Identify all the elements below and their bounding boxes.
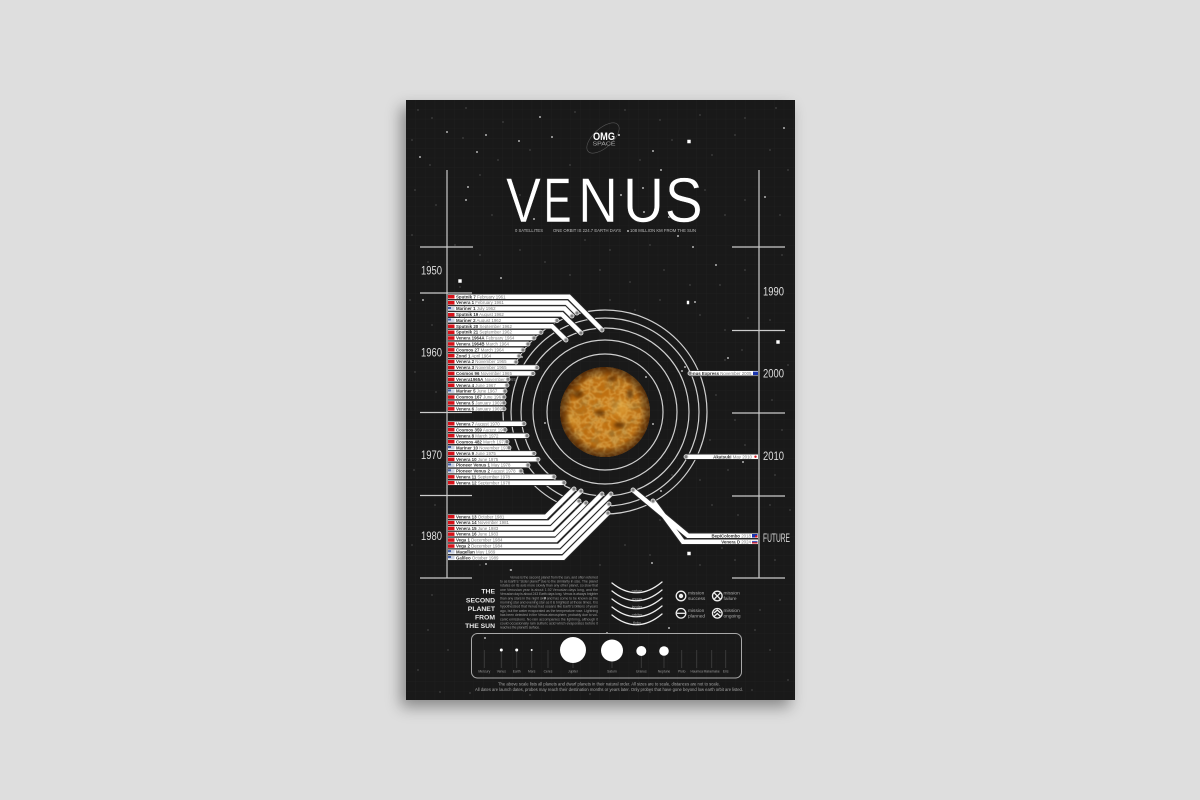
mission: Venus Express: Venus Express November 2005 — [688, 371, 752, 376]
mission: Venera 3: Venera 3 November 1965 — [456, 365, 507, 370]
mission: BepiColombo — [631, 488, 758, 538]
mission: Cosmos 167: Cosmos 167 June 1967 — [456, 395, 504, 400]
logo: OMG Space — [582, 118, 624, 158]
description text block: ago, but the water evaporated as the temperature rose. Lightning — [500, 609, 598, 613]
mission: Venera 1964B: Venera 1964B March 1964 — [456, 342, 510, 346]
description text block: Venusian day is about 243 Earth days long. Venus is always brighter — [500, 592, 599, 596]
missions 1970s — [448, 421, 566, 485]
poster grid texture — [406, 100, 795, 700]
mission: Cosmos 27: Cosmos 27 March 1964 — [456, 347, 504, 352]
description text block: could occasionally rain sulfuric acid which evaporates before it — [500, 622, 598, 626]
icon: mission failure — [712, 591, 722, 601]
mission: Galileo: Galileo October 1989 — [456, 555, 499, 560]
mission: Vega 2: Vega 2 December 1984 — [456, 544, 503, 549]
mission: Magellan — [448, 502, 611, 554]
footnote: The above scale lists all planets and dwarf planets in their natural order. All sizes are to scale, distances are not to scale. — [498, 682, 720, 686]
mission: Akatsuki: Akatsuki May 2010 — [713, 454, 753, 459]
label: mission success: success — [688, 597, 706, 602]
legend: mission types arcs: orbiter — [632, 613, 643, 617]
title: V — [506, 166, 541, 236]
title: S — [665, 166, 703, 236]
Venus: Venus — [497, 670, 506, 674]
year labels: 1960 — [421, 346, 442, 360]
Venus — [497, 648, 506, 674]
Earth: Earth — [513, 670, 521, 674]
footnote: All dates are launch dates, probes may reach their destination months or years later. Only probes that have gone beyond low earth orbit are listed. — [475, 687, 743, 692]
Haumea: Haumea — [690, 670, 703, 674]
mission: Cosmos 482: Cosmos 482 March 1972 — [456, 439, 507, 444]
mission: Venera 15: Venera 15 June 1983 — [456, 526, 499, 531]
mission: Venera 7: Venera 7 August 1970 — [456, 421, 500, 426]
Pluto: Pluto — [678, 670, 686, 674]
mission: Venera 13 — [448, 487, 576, 519]
Neptune: Neptune — [658, 670, 670, 674]
mission: Sputnik 7: Sputnik 7 February 1961 — [456, 294, 506, 299]
timeline axis left — [420, 170, 473, 578]
Ceres — [544, 650, 553, 674]
mission: Cosmos 96 — [448, 371, 535, 376]
subtitle facts: ONE ORBIT IS 224.7 EARTH DAYS — [553, 228, 621, 233]
mission: Cosmos 27 — [448, 347, 525, 352]
Ceres: Ceres — [544, 670, 553, 674]
planet Venus — [558, 365, 652, 460]
logo: OMG Space: OMG — [593, 131, 615, 143]
Mercury — [478, 650, 491, 674]
label: mission success: mission — [688, 592, 704, 596]
mission: Venera D: Venera D 2024 — [721, 539, 752, 544]
subtitle facts: 108 MILLION KM FROM THE SUN — [630, 228, 696, 233]
description text block: to as Earth's "sister planet" due to the similarity in size. The planet — [500, 580, 598, 584]
heading: the second planet from the sun: SECOND — [466, 597, 495, 604]
mission: Vega 2 — [448, 492, 613, 549]
mission: Venera 2: Venera 2 November 1965 — [456, 359, 507, 364]
Eris: Eris — [723, 670, 729, 674]
mission: Mariner 2: Mariner 2 August 1962 — [456, 318, 502, 323]
year labels: 2010 — [763, 449, 784, 463]
mission: Sputnik 7 — [448, 294, 604, 332]
label: mission ongoing: mission — [724, 609, 740, 614]
mission: Mariner 10: Mariner 10 November 1973 — [456, 445, 511, 450]
mission: Venera 5: Venera 5 January 1969 — [456, 400, 502, 406]
Eris — [723, 650, 729, 674]
legend: mission types arcs: flyby — [633, 621, 641, 625]
year labels: FUTURE — [763, 531, 790, 545]
mission: Venera 15 — [448, 499, 581, 531]
Haumea — [690, 650, 703, 674]
missions 1960s — [448, 294, 604, 411]
mission: Vega 1: Vega 1 December 1984 — [456, 538, 503, 543]
Makemake: Makemake — [704, 670, 720, 674]
heading: the second planet from the sun: THE — [481, 588, 495, 595]
dark casing behind mission bars — [448, 297, 758, 542]
mission: Zond 1 — [448, 353, 521, 358]
icon: mission planned — [676, 608, 686, 618]
heading: the second planet from the sun: PLANET — [468, 606, 496, 613]
mission: Sputnik 19 — [448, 312, 583, 335]
Jupiter — [560, 637, 586, 674]
mission: Venera 6: Venera 6 January 1969 — [456, 406, 502, 411]
mission: Mariner 2 — [448, 318, 559, 323]
label: mission failure: mission — [724, 592, 740, 596]
legend: mission status — [676, 590, 741, 620]
mission: Venera 1964B — [448, 342, 530, 346]
Uranus: Uranus — [636, 670, 647, 674]
label: mission planned: planned — [688, 614, 705, 620]
mission: Venera 11: Venera 11 September 1978 — [456, 474, 511, 479]
description text block: reaches the planet's surface. — [500, 626, 540, 630]
legend: mission types arcs: moon — [632, 597, 642, 601]
mission: Venera 1964A: Venera 1964A February 1964 — [456, 336, 515, 341]
mission: Vega 1 — [448, 492, 604, 543]
legend: mission types arcs — [612, 582, 662, 625]
Earth — [513, 648, 521, 674]
mission: Mariner 5 — [448, 389, 507, 394]
mission: Cosmos 359: Cosmos 359 August 1970 — [456, 427, 508, 432]
mission: Venera 1 — [448, 300, 579, 315]
mission: Cosmos 96: Cosmos 96 November 1965 — [456, 371, 512, 376]
description text block: one Venusian year is about 1.92 Venusian days long, and the — [500, 588, 598, 592]
subtitle facts — [515, 228, 696, 233]
orbit rings — [503, 310, 707, 514]
mission: Venera 9: Venera 9 June 1975 — [456, 451, 496, 456]
legend: mission types arcs: nature — [632, 589, 642, 593]
mission: Zond 1: Zond 1 April 1964 — [456, 353, 492, 358]
mission: Magellan: Magellan May 1989 — [456, 549, 496, 554]
title — [506, 166, 703, 236]
mission: Akatsuki — [684, 454, 758, 459]
year labels: 2000 — [763, 366, 784, 380]
year labels — [421, 264, 790, 545]
Uranus — [636, 646, 647, 674]
mission: Sputnik 19: Sputnik 19 August 1962 — [456, 312, 504, 317]
Pluto — [678, 650, 686, 674]
description text block: morning star and evening star as it is brightest at those times. It is — [500, 600, 598, 604]
star field — [410, 108, 790, 695]
mission: Pioneer Venus 1: Pioneer Venus 1 May 1978 — [456, 463, 511, 468]
description text block — [500, 575, 599, 630]
mission: Venera 4: Venera 4 June 1967 — [456, 383, 496, 388]
Jupiter: Jupiter — [568, 670, 579, 674]
description text block: rotates on its axis more slowly than any other planet, so slow that — [500, 584, 598, 588]
mission: Venera 16 — [448, 501, 588, 537]
label: mission failure: failure — [724, 596, 737, 602]
description text block: has been detected in the Venus atmosphere, probably due to vol- — [500, 613, 599, 617]
icon: mission ongoing — [712, 608, 722, 618]
mission: Venera 4 — [448, 383, 509, 388]
mission: Mariner 1: Mariner 1 July 1962 — [456, 306, 496, 311]
mission: Venera 10: Venera 10 June 1975 — [456, 457, 499, 462]
title: E — [544, 166, 572, 236]
description text block: canic emissions. No rain accompanies the lightning, although it — [500, 617, 598, 621]
year labels: 1950 — [421, 264, 442, 278]
label: mission planned: mission — [688, 609, 704, 614]
subtitle facts: 0 SATELLITES — [515, 228, 543, 233]
mission: Venera 12: Venera 12 September 1978 — [456, 480, 511, 485]
title: N — [578, 166, 618, 236]
heading: the second planet from the sun: FROM — [475, 614, 495, 621]
mission: Sputnik 21: Sputnik 21 September 1962 — [456, 330, 512, 335]
mission: Venera 14 — [448, 489, 583, 525]
planet scale panel — [472, 634, 742, 678]
missions 1980s — [448, 487, 613, 560]
timeline axis right — [732, 170, 785, 578]
Saturn: Saturn — [607, 670, 617, 674]
Makemake — [704, 650, 720, 674]
mission: Sputnik 20: Sputnik 20 September 1962 — [456, 324, 512, 329]
heading: the second planet from the sun: THE SUN — [465, 623, 495, 630]
mission: Venera 3 — [448, 365, 539, 370]
mission: Mariner 1 — [448, 306, 574, 318]
mission: Sputnik 20 — [448, 324, 568, 342]
mission: Pioneer Venus 2: Pioneer Venus 2 August 1978 — [456, 469, 516, 474]
title: U — [623, 166, 664, 236]
mission: Venera 1964A — [448, 336, 536, 341]
logo: OMG Space: SPACE — [592, 142, 616, 148]
mission: Venera 14: Venera 14 November 1981 — [456, 520, 510, 525]
Saturn — [601, 640, 623, 674]
Mars — [528, 649, 536, 674]
year labels: 1980 — [421, 529, 442, 543]
mission: Venera 1: Venera 1 February 1961 — [456, 300, 504, 305]
mission: Galileo — [448, 511, 610, 560]
icon: mission success — [676, 591, 686, 601]
mission: Venera D — [651, 499, 758, 544]
year labels: 1990 — [763, 284, 784, 298]
mission: Venera 1965A: Venera1965A November 1965 — [456, 377, 516, 382]
footnote — [475, 682, 743, 692]
missions right side — [631, 371, 758, 544]
description text block: than any stars in the night sky, and has come to be known as the — [500, 596, 598, 600]
mission: Mariner 5: Mariner 5 June 1967 — [456, 389, 498, 394]
Mars: Mars — [528, 670, 536, 674]
description text block: Venus is the second planet from the sun, and often referred — [510, 575, 598, 579]
Mercury: Mercury — [478, 670, 491, 674]
description text block: hypothesized that Venus had oceans like Earth's billions of years — [500, 605, 598, 609]
heading: the second planet from the sun — [465, 588, 496, 630]
poster background — [406, 100, 795, 700]
mission: BepiColombo: BepiColombo 2018 — [711, 533, 752, 538]
Neptune — [658, 646, 670, 674]
mission: Venera 8: Venera 8 March 1972 — [456, 433, 499, 438]
mission: Sputnik 21 — [448, 330, 543, 335]
label: mission ongoing: ongoing — [724, 614, 741, 620]
mission: Venera 13: Venera 13 October 1981 — [456, 514, 505, 519]
mission: Venera 16: Venera 16 June 1983 — [456, 532, 499, 537]
year labels: 1970 — [421, 448, 442, 462]
legend: mission types arcs: lander — [632, 605, 643, 609]
